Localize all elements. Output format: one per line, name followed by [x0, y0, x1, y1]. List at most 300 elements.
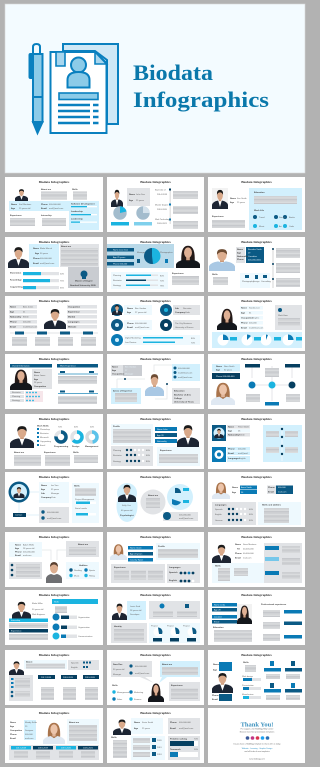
slide 12: woman with circle timeline: 32 years — [224, 368, 232, 372]
slide 3: profile with education and icons: Ken Smith — [237, 197, 247, 200]
slide 27: man with icon boxes: Email — [212, 699, 218, 701]
slide 16: circular portrait with contact details: Project Management — [75, 498, 95, 501]
slide 12: woman with circle timeline — [208, 354, 305, 409]
slide 5: woman with pie panel — [107, 237, 204, 292]
slide 28: woman with year boxes: Phone — [10, 734, 17, 736]
slide 1: profile with skills: About me — [41, 188, 52, 191]
slide 18: woman with language ratings: Skills and abilities — [262, 504, 282, 506]
slide 19: man with connected panels: About me — [78, 543, 89, 546]
slide 15: squares with central timeline: 000-000 — [238, 449, 246, 451]
slide 25: man with three columns: 2019-2020 — [85, 677, 96, 679]
slide 13: man with donut charts: Biodata Infographics — [39, 417, 70, 421]
slide 10: overall information with ratings: Work Experience — [60, 365, 77, 368]
slide 26: woman with speech bubbles: Management — [117, 691, 130, 694]
slide 19: man with connected panels: Sports — [89, 569, 95, 572]
slide 24: woman with professional experience: Professional experience — [261, 604, 287, 606]
slide 11: portrait with connected panels: Biodata Infographics — [140, 357, 171, 361]
slide 5: woman with pie panel: Phone 000-000 — [113, 264, 128, 266]
slide 23: man with gray panels and pies: 28 years old — [130, 609, 142, 612]
slide 6: man with timeline: Skills — [212, 274, 218, 276]
slide 13: man with donut charts — [5, 414, 103, 469]
slide 22: man with cyan header and bars: Internship — [11, 619, 21, 622]
slide 2: profile with pies and timeline: Biodata Infographics — [140, 180, 171, 184]
slide 5: woman with pie panel: Experience — [172, 273, 184, 275]
slide 11: portrait with connected panels: Name — [112, 366, 119, 368]
slide 4: profile with progress bars: 000-000-000 — [40, 258, 53, 260]
slide 16: circular portrait with contact details: Manager — [51, 492, 60, 495]
slide 4: profile with progress bars: Stanford University 2009 — [70, 284, 96, 287]
slide 14: man with ratings: Illustrator — [113, 454, 122, 457]
slide 1: profile with skills: Karl Martinez — [19, 203, 31, 206]
slide 1: profile with skills: Internship — [41, 214, 52, 217]
slide 3: profile with education and icons: Age — [230, 201, 235, 204]
slide 28: woman with year boxes: 2018-2019 — [38, 748, 49, 750]
slide 7: man with milestones: Alex Jones — [23, 306, 33, 308]
slide 22: man with cyan header and bars: Web Engineer — [32, 613, 45, 616]
slide 18: woman with language ratings: English — [215, 514, 223, 516]
slide 27: man with icon boxes: Phone — [212, 695, 219, 697]
slide 12: woman with circle timeline: Nora Smith — [224, 365, 235, 368]
slide 1: profile with skills: Leadership — [71, 218, 83, 220]
slide 12: woman with circle timeline: Name — [216, 366, 223, 368]
slide 14: man with ratings: 40% — [146, 450, 150, 452]
slide 13: man with donut charts: Photoshop — [40, 428, 51, 431]
slide 29: man with skills and bars — [107, 708, 204, 763]
slide 15: squares with central timeline: 26 — [238, 431, 241, 433]
slide 23: man with gray panels and pies: Biodata Infographics — [140, 593, 171, 597]
slide 14: man with ratings: Experience — [160, 450, 172, 452]
slide 27: man with icon boxes: Manufacture — [242, 693, 254, 696]
slide 9: woman with four pies: Graphic — [252, 316, 259, 320]
slide 18: woman with language ratings: Phone — [268, 487, 275, 489]
slide 11: portrait with connected panels: Education — [174, 390, 185, 392]
slide 14: man with ratings: Profile — [113, 426, 121, 428]
slide 22: man with cyan header and bars: Skills — [54, 601, 59, 603]
slide 3: profile with education and icons — [208, 177, 305, 232]
slide 2: profile with pies and timeline — [107, 177, 204, 232]
slide 1: profile with skills: Skills — [72, 189, 78, 191]
slide 29: man with skills and bars: 70% — [194, 738, 198, 740]
slide 19: man with connected panels: Name — [15, 544, 22, 546]
slide 2: profile with pies and timeline: Name — [129, 194, 136, 196]
slide 9: woman with four pies: 31 — [249, 312, 252, 314]
slide 11: portrait with connected panels: Areas of Expertise — [113, 390, 133, 392]
slide 1: profile with skills: 25 years old — [19, 207, 31, 210]
slide 16: circular portrait with contact details: Ian Tom — [51, 485, 59, 487]
slide 5: woman with pie panel: 70% — [160, 280, 164, 282]
slide 28: woman with year boxes: 000-000 — [25, 734, 33, 736]
slide 21: man with timeline boxes: 00-000-000 — [243, 553, 254, 555]
slide 13: man with donut charts: Management — [85, 445, 99, 448]
slide 20: woman with experience and language: Biodata Infographics — [140, 535, 171, 539]
slide 15: squares with central timeline: Peter Smith — [238, 426, 250, 429]
slide 16: circular portrait with contact details: Name — [41, 485, 48, 487]
slide 5: woman with pie panel: Age 25 years — [113, 256, 125, 259]
slide 21: man with timeline boxes: mail.com — [243, 558, 252, 560]
slide 27: man with icon boxes: Age — [213, 668, 218, 672]
slide 8: circles with contact details: Phone — [127, 323, 134, 325]
slide 6: man with timeline: Consulting — [261, 280, 272, 283]
slide 13: man with donut charts: Programming — [54, 446, 69, 448]
slide 18: woman with language ratings: Age — [232, 491, 237, 494]
slide 20: woman with experience and language: Spanish — [169, 572, 178, 574]
slide 7: man with milestones: Languages — [68, 322, 80, 324]
slide 9: woman with four pies: Phone — [241, 322, 248, 324]
slide 11: portrait with connected panels: mail@mail.com — [178, 372, 193, 374]
slide 4: profile with progress bars — [5, 237, 103, 292]
slide 17: circles infographic: About me — [148, 494, 159, 497]
slide 7: man with milestones: 000-000 — [23, 322, 31, 324]
pie charts — [154, 628, 196, 636]
slide 5: woman with pie panel: Strategy — [113, 284, 122, 287]
slide 3: profile with education and icons: Experience — [212, 216, 224, 218]
slide 4: profile with progress bars: Copywriting — [10, 286, 23, 288]
slide 3: profile with education and icons: Travel — [259, 216, 265, 219]
slide 27: man with icon boxes: Web design — [242, 676, 254, 678]
slide 18: woman with language ratings: mail.com — [278, 492, 287, 494]
slide 28: woman with year boxes: Mandy Keller — [25, 721, 37, 724]
slide 14: man with ratings: 60% — [146, 455, 150, 457]
slide 18: woman with language ratings: 80% — [249, 520, 253, 522]
slide 10: overall information with ratings: Overall Information — [12, 365, 30, 368]
slide 8: circles with contact details: Law Review — [125, 342, 137, 344]
slide 9: woman with four pies: Name — [241, 308, 248, 310]
slide 21: man with timeline boxes: Biodata Infographics — [241, 535, 272, 539]
slide 3: profile with education and icons: Books — [289, 217, 295, 219]
slide 29: man with skills and bars: 2020 — [157, 740, 162, 742]
slide 7: man with milestones: Nationality — [10, 316, 22, 318]
slide 14: man with ratings: Age 28 — [157, 434, 164, 437]
slide 21: man with timeline boxes — [208, 532, 305, 587]
slide 7: man with milestones: Biodata Infographics — [39, 299, 70, 303]
slide 8: circles with contact details — [107, 296, 204, 351]
slide 16: circular portrait with contact details: Job — [41, 493, 46, 495]
slide 26: woman with speech bubbles: About me — [162, 663, 173, 666]
slide 1: profile with skills: Leadership — [71, 211, 83, 213]
slide 8: circles with contact details: Vodo — [185, 312, 191, 314]
slide 11: portrait with connected panels: mail@mail.com — [178, 377, 193, 379]
slide 29: man with skills and bars: 50% — [194, 749, 198, 751]
slide 4: profile with progress bars: Phone — [33, 258, 40, 260]
slide 19: man with connected panels: Email — [15, 555, 21, 557]
slide 28: woman with year boxes: Occupation — [10, 729, 23, 732]
slide 6: man with timeline: Biodata Infographics — [241, 240, 272, 244]
slide 4: profile with progress bars: mail@mail.com — [40, 263, 55, 265]
pie charts — [218, 334, 294, 346]
slide 1: profile with skills: mail@mail.com — [49, 208, 64, 210]
slide 24: woman with professional experience: Age 28 — [214, 608, 221, 612]
slide 16: circular portrait with contact details: Company — [41, 497, 52, 499]
slide 13: man with donut charts: Illustrator — [40, 432, 49, 435]
slide 16: circular portrait with contact details: Age — [41, 488, 46, 491]
slide 7: man with milestones: Website — [68, 326, 77, 328]
slide 5: woman with pie panel: Illustrator — [113, 279, 122, 282]
slide 6: man with timeline: Photography — [242, 280, 255, 283]
slide 14: man with ratings: Strategy — [113, 460, 122, 463]
slide 13: man with donut charts: About me — [14, 451, 25, 454]
slide 29: man with skills and bars: 2019 — [157, 747, 162, 749]
slide 22: man with cyan header and bars — [5, 590, 103, 645]
slide 4: profile with progress bars: Illustration — [10, 272, 22, 274]
slide 18: woman with language ratings: German — [215, 519, 223, 522]
slide 10: overall information with ratings: Planning — [12, 396, 21, 398]
slide 9: woman with four pies: Email — [241, 328, 247, 330]
slide 19: man with connected panels: 000-000-000 — [23, 552, 36, 554]
slide 21: man with timeline boxes: Sean Martinez — [243, 543, 256, 546]
slide 20: woman with experience and language — [107, 532, 204, 587]
slide 8: circles with contact details: mail@mail.com — [135, 327, 150, 329]
slide 19: man with connected panels: Biodata Infographics — [39, 535, 70, 539]
slide 10: overall information with ratings: Age — [34, 378, 39, 381]
slide 1: profile with skills — [5, 177, 103, 232]
slide 14: man with ratings — [107, 414, 204, 469]
slide 16: circular portrait with contact details: Biodata Infographics — [39, 475, 70, 479]
slide 15: squares with central timeline: Biodata Infographics — [241, 417, 272, 421]
slide 10: overall information with ratings: Biodata Infographics — [39, 357, 70, 361]
slide 1: profile with skills: Phone — [41, 204, 48, 206]
slide 6: man with timeline — [208, 237, 305, 292]
slide 3: profile with education and icons: Art — [279, 225, 282, 228]
slide 28: woman with year boxes: Age — [10, 725, 15, 728]
slide 9: woman with four pies: Biodata Infographics — [241, 299, 272, 303]
slide 5: woman with pie panel: Biodata Infographics — [140, 240, 171, 244]
slide 4: profile with progress bars: Email — [33, 263, 39, 265]
slide 4: profile with progress bars: Name — [33, 248, 40, 250]
slide 2: profile with pies and timeline: Bachelor of — [155, 188, 166, 192]
slide 19: man with connected panels: Age — [15, 547, 20, 550]
slide 4: profile with progress bars: Master of Degree — [75, 280, 94, 282]
slide 6: man with timeline: 29 — [248, 252, 251, 254]
slide 28: woman with year boxes: 2019-2020 — [61, 748, 72, 750]
slide 13: man with donut charts: 60% — [74, 426, 78, 428]
slide 23: man with gray panels and pies: Lewis Ford — [130, 605, 141, 608]
slide 18: woman with language ratings: 40% — [249, 509, 253, 511]
slide 29: man with skills and bars: Phone — [170, 722, 177, 724]
slide 29: man with skills and bars: Problem solving — [170, 738, 188, 740]
heading: Biodata Infographics: Infographics — [133, 87, 269, 112]
slide 13: man with donut charts: Design — [72, 446, 80, 448]
slide 15: squares with central timeline: Name — [228, 427, 235, 429]
slide 24: woman with professional experience: Location — [214, 616, 223, 618]
slide 5: woman with pie panel: Photographer — [160, 251, 173, 254]
slide 15: squares with central timeline — [208, 414, 305, 469]
slide 16: circular portrait with contact details: Social media — [75, 508, 88, 510]
slide 19: man with connected panels: Music — [74, 576, 79, 578]
slide 21: man with timeline boxes: 00-000-000 — [243, 548, 254, 550]
slide 22: man with cyan header and bars: Communication — [78, 635, 93, 638]
icon: front document — [50, 52, 106, 133]
slide 29: man with skills and bars: 000-000-000 — [179, 722, 192, 724]
slide 8: circles with contact details: Age — [127, 311, 132, 314]
slide 8: circles with contact details: Company — [175, 312, 186, 314]
slide 23: man with gray panels and pies: Developer — [130, 613, 140, 616]
slide 8: circles with contact details: 27 years old — [135, 311, 147, 314]
slide 20: woman with experience and language: Age 24 years — [130, 552, 142, 556]
slide 11: portrait with connected panels: University of Texas — [174, 400, 195, 404]
slide 3: profile with education and icons: Soccer — [279, 216, 286, 219]
slide 21: man with timeline boxes: Tel — [237, 548, 240, 550]
slide 7: man with milestones: Phone — [10, 322, 17, 324]
slide 29: man with skills and bars: 25 years — [142, 727, 150, 730]
slide 9: woman with four pies: 000-000 — [249, 322, 257, 324]
slide 17: circles infographic: Psychologist — [120, 514, 134, 517]
slide 8: circles with contact details: Digital Marketing — [125, 336, 141, 340]
pie chart — [136, 206, 150, 220]
slide 3: profile with education and icons: Biodata Infographics — [241, 180, 272, 184]
slide 26: woman with speech bubbles: Marketing — [134, 691, 144, 694]
slide 9: woman with four pies: Age — [241, 312, 246, 314]
slide 11: portrait with connected panels: Manager — [125, 372, 134, 376]
slide 8: circles with contact details: 80% — [191, 338, 195, 340]
pie chart — [144, 248, 161, 264]
slide 18: woman with language ratings: Spanish — [215, 509, 223, 511]
slide 8: circles with contact details: Recruiter — [183, 307, 192, 310]
slide 7: man with milestones: Email — [10, 326, 16, 328]
slide 4: profile with progress bars: About me — [61, 245, 72, 248]
slide 19: man with connected panels: Hobbies — [79, 565, 88, 567]
slide 10: overall information with ratings: Strategy — [12, 399, 21, 402]
slide 16: circular portrait with contact details: Skills — [74, 486, 80, 488]
slide 28: woman with year boxes: 2017-2018 — [16, 748, 27, 750]
slide 7: man with milestones: Experience — [68, 312, 80, 314]
slide 8: circles with contact details: 70% — [191, 342, 195, 344]
slide 13: man with donut charts: Skills — [73, 452, 79, 454]
slide 26: woman with speech bubbles: Sara Doe — [113, 664, 123, 666]
slide 9: woman with four pies — [208, 296, 305, 351]
slide 18: woman with language ratings: 34 — [241, 492, 244, 494]
slide 5: woman with pie panel: Name Jane Doe — [113, 250, 129, 252]
slide 7: man with milestones: Name — [10, 306, 17, 308]
slide 16: circular portrait with contact details: 000-000-000 — [47, 512, 60, 514]
slide 18: woman with language ratings: 60% — [249, 514, 253, 516]
slide 26: woman with speech bubbles: Manager — [113, 673, 122, 676]
slide 28: woman with year boxes: Biodata Infographics — [39, 711, 70, 715]
slide 3: profile with education and icons: Music — [259, 226, 264, 228]
slide 13: man with donut charts: Copywriting — [40, 440, 52, 443]
slide 27: man with icon boxes: Name — [213, 664, 220, 666]
slide 28: woman with year boxes: 2020-2021 — [83, 748, 94, 750]
slide 7: man with milestones: Marital — [68, 316, 75, 318]
slide 15: squares with central timeline: Languages — [228, 458, 240, 460]
slide 10: overall information with ratings — [5, 354, 103, 409]
slide 30: thank you: For support, visit SlideEgg Help Center — [241, 728, 274, 730]
slide 29: man with skills and bars: Skills — [111, 737, 117, 739]
slide 13: man with donut charts: 50% — [90, 426, 94, 428]
slide 22: man with cyan header and bars: Experience — [11, 630, 22, 632]
slide 11: portrait with connected panels: Ben Gordon — [125, 366, 137, 368]
slide 26: woman with speech bubbles: Sales — [117, 699, 122, 701]
slide 20: woman with experience and language: Languages — [169, 567, 181, 569]
slide 11: portrait with connected panels: Bachelor of Arts — [174, 394, 192, 396]
slide 29: man with skills and bars: Teamwork — [170, 749, 181, 751]
slide 6: man with timeline: Nationality — [237, 255, 249, 258]
slide 28: woman with year boxes: Email — [10, 738, 16, 740]
slide 26: woman with speech bubbles: mail@mail.com — [135, 673, 150, 675]
slide 3: profile with education and icons: Code — [289, 226, 295, 228]
slide 15: squares with central timeline: Phone — [228, 449, 235, 451]
slide 28: woman with year boxes: 29 — [25, 726, 28, 728]
slide 7: man with milestones: Age — [10, 310, 15, 314]
slide 21: man with timeline boxes: Skills — [215, 566, 221, 568]
slide 16: circular portrait with contact details: 35 years — [51, 488, 59, 491]
slide 7: man with milestones: mail@mail.com — [23, 326, 38, 328]
slide 28: woman with year boxes: About me — [69, 721, 80, 724]
slide 1: profile with skills: Age — [11, 207, 16, 210]
slide 23: man with gray panels and pies: Project — [167, 624, 174, 628]
slide 13: man with donut charts: Work Skills — [37, 426, 50, 428]
slide 27: man with icon boxes: Biodata Infographics — [241, 653, 272, 657]
slide 7: man with milestones: Occupation — [68, 306, 81, 308]
slide 19: man with connected panels: 28 years old — [23, 547, 35, 550]
slide 14: man with ratings: Planning — [113, 450, 122, 452]
slide 30: thank you: Website · Learning · Graphic Design — [242, 747, 272, 750]
slide 20: woman with experience and language: Profile — [158, 546, 166, 548]
slide 2: profile with pies and timeline: 2018-2020 — [157, 209, 168, 211]
slide 1: profile with skills: Name — [11, 204, 18, 206]
slide 19: man with connected panels — [5, 532, 103, 587]
slide 28: woman with year boxes: Name — [10, 722, 17, 724]
panel: cover slide — [5, 4, 305, 173]
slide 2: profile with pies and timeline: Web Technology — [155, 219, 171, 221]
slide 8: circles with contact details: Name — [127, 308, 134, 310]
slide 2: profile with pies and timeline: Master degree — [155, 204, 169, 206]
slide 30: thank you: and all kinds of new templates — [244, 750, 270, 753]
slide 18: woman with language ratings: 000-000 — [278, 487, 286, 489]
slide 19: man with connected panels: mail.com — [23, 555, 32, 557]
slide 17: circles infographic: Kelly Cox — [122, 505, 132, 507]
slide 4: profile with progress bars: Knowledge — [10, 280, 22, 282]
slide 9: woman with four pies: Sandra Lee — [249, 306, 261, 310]
slide 5: woman with pie panel: 80% — [160, 276, 164, 278]
slide 13: man with donut charts: 70% — [58, 426, 62, 428]
slide 20: woman with experience and language: Name Claire — [130, 546, 142, 550]
slide 9: woman with four pies: mail@mail.com — [249, 328, 264, 330]
slide 14: man with ratings: Biodata Infographics — [140, 417, 171, 421]
slide 29: man with skills and bars: Age — [134, 727, 139, 730]
slide 5: woman with pie panel: Manager — [137, 251, 146, 254]
slide 29: man with skills and bars: Biodata Infographics — [140, 711, 171, 715]
slide 25: man with three columns: 2017-2018 — [41, 677, 52, 679]
slide 18: woman with language ratings: Name — [232, 487, 239, 489]
slide 18: woman with language ratings: Languages — [215, 504, 227, 506]
slide 12: woman with circle timeline: Age — [216, 368, 221, 372]
slide 8: circles with contact details: University of France — [175, 326, 194, 329]
slide 26: woman with speech bubbles: Skills — [112, 685, 118, 687]
slide 14: man with ratings: Name John — [157, 429, 168, 431]
slide 11: portrait with connected panels: Age — [112, 369, 117, 372]
donut charts — [56, 432, 97, 442]
heading: Biodata Infographics: Biodata — [133, 60, 213, 85]
slide 4: profile with progress bars: Biodata Infographics — [39, 240, 70, 244]
slide 12: woman with circle timeline: Phone 000-000-000 — [216, 376, 235, 378]
heading: Thank You!: Thank You! — [241, 722, 273, 728]
slide 29: man with skills and bars: Kevin Smith — [142, 721, 154, 724]
slide 2: profile with pies and timeline: Age — [129, 199, 134, 202]
slide 15: squares with central timeline: Age — [228, 430, 233, 433]
slide 3: profile with education and icons: Name — [230, 198, 237, 200]
slide 6: man with timeline: Design — [253, 281, 260, 283]
slide 13: man with donut charts: Microsoft — [40, 436, 49, 439]
slide 6: man with timeline: Age — [237, 252, 242, 254]
slide 26: woman with speech bubbles — [107, 650, 204, 705]
slide 14: man with ratings: 80% — [146, 461, 150, 463]
slide 18: woman with language ratings: Biodata Infographics — [241, 475, 272, 479]
slide 30: thank you: Browse more free presentation templates — [240, 730, 274, 734]
slide 23: man with gray panels and pies — [107, 590, 204, 645]
slide 9: woman with four pies: Occupation — [241, 316, 254, 320]
slide 17: circles infographic: 000-000-000 — [179, 514, 192, 516]
slide 27: man with icon boxes — [208, 650, 305, 705]
